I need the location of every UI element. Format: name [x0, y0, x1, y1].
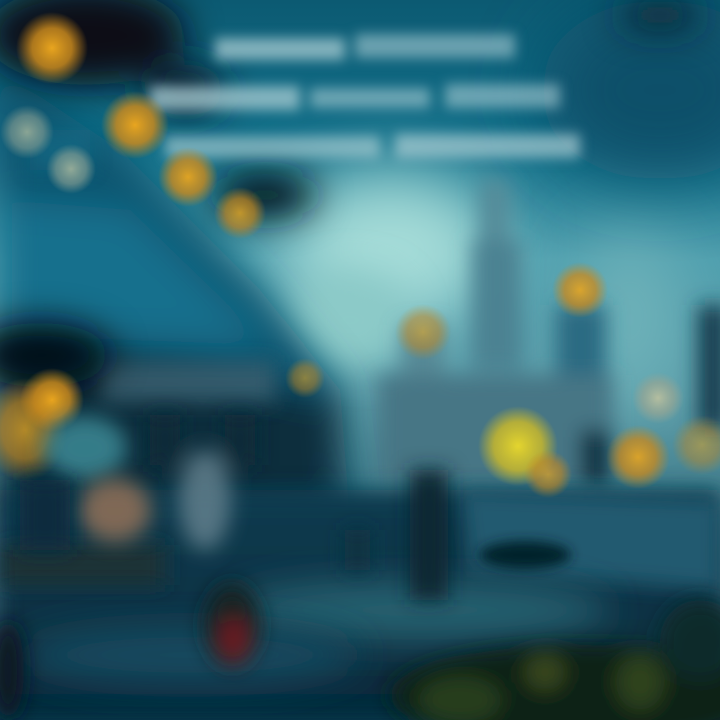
castle towers skyline: [378, 180, 720, 485]
left building facade: [0, 70, 350, 560]
pedestrians: [20, 415, 448, 667]
title placeholder: illegible blurred heading bands: [150, 34, 580, 158]
dark clouds: [0, 0, 702, 387]
street lights: [0, 12, 720, 542]
foreground foliage: [0, 600, 720, 720]
street foreground: [0, 490, 720, 720]
